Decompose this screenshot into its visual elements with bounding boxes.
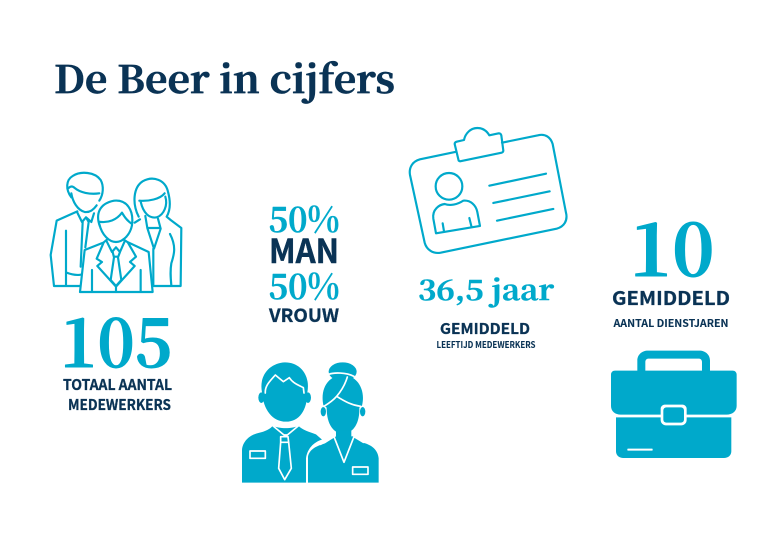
icon: id badge	[410, 128, 566, 253]
gender statistics: 50%	[268, 260, 340, 310]
icon: team of three colleagues	[51, 173, 181, 292]
caption: totaal aantal medewerkers: TOTAAL AANTAL	[63, 374, 172, 395]
caption: totaal aantal medewerkers	[63, 374, 172, 415]
caption: gemiddeld leeftijd medewerkers	[436, 318, 536, 351]
statistic: average age: 36,5 jaar	[418, 269, 554, 309]
gender statistics	[268, 193, 340, 328]
caption: gemiddeld aantal dienstjaren: GEMIDDELD	[612, 284, 730, 311]
caption: gemiddeld leeftijd medewerkers: GEMIDDELD	[440, 318, 530, 339]
gender statistics: MAN	[269, 225, 339, 273]
icon: man and woman	[242, 362, 379, 483]
caption: gemiddeld leeftijd medewerkers: LEEFTIJD MEDEWERKERS	[436, 338, 536, 351]
caption: gemiddeld aantal dienstjaren: AANTAL DIENSTJAREN	[612, 316, 728, 331]
title: De Beer in cijfers	[54, 49, 395, 104]
icon: briefcase	[611, 351, 737, 458]
caption: gemiddeld aantal dienstjaren	[612, 284, 730, 331]
big number 105: 105	[60, 290, 172, 387]
gender statistics: VROUW	[268, 302, 339, 328]
caption: totaal aantal medewerkers: MEDEWERKERS	[68, 394, 171, 415]
big number 10: 10	[630, 192, 714, 298]
gender statistics: 50%	[268, 193, 340, 243]
